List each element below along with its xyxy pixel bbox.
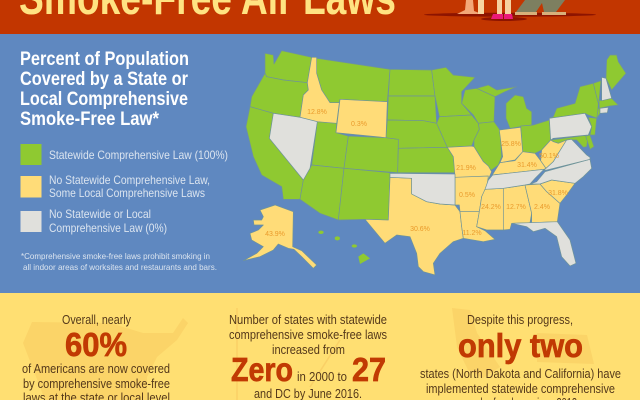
legend — [20, 144, 228, 235]
heading: map section: Smoke-Free Law* — [20, 109, 160, 130]
map percentage labels — [265, 109, 568, 238]
legend: No Statewide or Local — [49, 207, 151, 221]
heading: map section: Covered by a State or — [20, 69, 189, 90]
map percentage labels: 21.9% — [456, 165, 476, 172]
states: statewide comprehensive law — [246, 51, 626, 220]
map percentage labels: 11.2% — [462, 230, 482, 237]
text block: only two fact: only two — [458, 327, 583, 364]
map percentage labels: 12.7% — [506, 204, 526, 211]
map percentage labels: 43.9% — [265, 231, 285, 238]
panel: map section background — [0, 34, 640, 293]
map percentage labels: 25.8% — [501, 141, 521, 148]
legend: Statewide Comprehensive Law (100%) — [49, 148, 228, 162]
icon: people standing — [424, 0, 596, 21]
panel: bottom facts band — [0, 293, 640, 400]
map percentage labels: 31.4% — [517, 162, 537, 169]
text block: zero to 27 fact: 27 — [352, 351, 386, 388]
icon: California and North Dakota watermark — [452, 308, 594, 378]
text block: zero to 27 fact: comprehensive smoke-free laws — [229, 327, 387, 342]
map percentage labels: 2.4% — [534, 204, 550, 211]
text block: 60 percent fact: by comprehensive smoke-free — [23, 376, 170, 391]
footnote — [21, 251, 217, 272]
panel: header band — [0, 0, 640, 34]
chart: US map by state law coverage — [243, 51, 626, 275]
text block: zero to 27 fact — [229, 312, 387, 400]
states: no law — [269, 77, 612, 266]
heading: map section — [20, 49, 189, 130]
map percentage labels: 50.1% — [539, 153, 559, 160]
icon: rising arrow watermark — [237, 308, 340, 400]
map percentage labels: 30.6% — [410, 226, 430, 233]
map percentage labels: 0.3% — [351, 121, 367, 128]
legend: Some Local Comprehensive Laws — [49, 186, 205, 200]
text block: zero to 27 fact: Zero — [231, 351, 293, 388]
text block: zero to 27 fact: Number of states with statewide — [229, 312, 387, 327]
text block: zero to 27 fact: increased from — [272, 342, 345, 357]
heading: map section: Percent of Population — [20, 49, 189, 70]
map percentage labels: 12.8% — [307, 109, 327, 116]
map percentage labels: 24.2% — [481, 204, 501, 211]
text block: 60 percent fact: Overall, nearly — [62, 312, 131, 327]
map percentage labels: 31.8% — [548, 190, 568, 197]
text block: zero to 27 fact: in 2000 to — [297, 369, 347, 384]
states: some local laws — [243, 57, 575, 275]
text block: only two fact: Despite this progress, — [467, 312, 573, 327]
legend: Comprehensive Law (0%) — [49, 221, 167, 235]
text block: 60 percent fact: 60% — [65, 326, 127, 363]
footnote: *Comprehensive smoke-free laws prohibit smoking in — [21, 251, 210, 261]
icon: US silhouette watermark — [23, 318, 188, 400]
text block: 60 percent fact: of Americans are now covered — [22, 361, 170, 376]
state: Hawaii — [318, 231, 370, 264]
footnote: all indoor areas of worksites and restaurants and bars. — [23, 262, 217, 272]
legend: No Statewide Comprehensive Law, — [49, 173, 210, 187]
heading: map section: Local Comprehensive — [20, 89, 188, 110]
map percentage labels: 0.5% — [459, 192, 475, 199]
text block: 60 percent fact — [22, 312, 170, 400]
text block: only two fact — [420, 312, 621, 400]
